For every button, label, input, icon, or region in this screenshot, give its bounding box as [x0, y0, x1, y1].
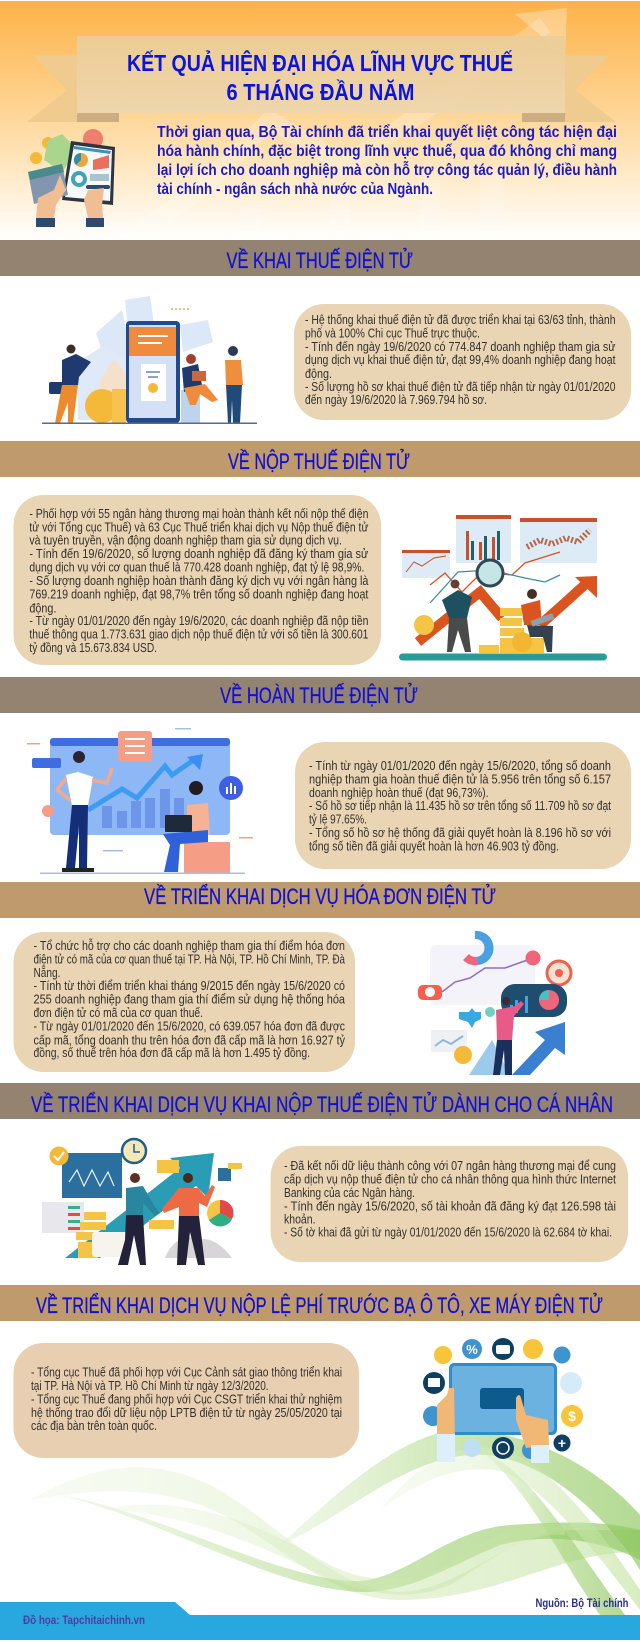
e-refund text: tỷ lệ 97.65%. — [309, 812, 367, 826]
e-refund text: doanh nghiệp hoàn thuế (đạt 96,73%). — [309, 786, 489, 800]
illustration: tablet with service icons: $ — [568, 1408, 576, 1424]
e-invoice text: 255 doanh nghiệp đang tham gia thí điểm sử dụng hệ thống hóa — [34, 992, 345, 1006]
illustration: tablet with service icons — [423, 1338, 583, 1463]
registration fee text: hệ thống trao đổi dữ liệu nộp LPTB điện tử từ ngày 25/05/2020 tại — [31, 1406, 342, 1420]
e-invoice text: - Từ ngày 01/01/2020 đến 15/6/2020, có 639.057 hóa đơn đã được — [34, 1020, 345, 1034]
footer credit: Đồ họa: Tapchitaichinh.vn — [23, 1615, 145, 1627]
registration fee text: tại TP. Hà Nội và TP. Hồ Chí Minh từ ngày 12/3/2020. — [31, 1379, 269, 1393]
header background — [0, 1, 640, 240]
title: KẾT QUẢ HIỆN ĐẠI HÓA LĨNH VỰC THUẾ — [127, 48, 513, 76]
footer band — [0, 1602, 640, 1640]
registration fee text: - Tổng cục Thuế đã phối hợp với Cục Cảnh sát giao thông triển khai — [31, 1366, 342, 1380]
e-payment text: dụng dịch vụ với cơ quan thuế là 770.428 doanh nghiệp, đạt tỷ lệ 98,9%. — [29, 560, 364, 574]
e-payment text: - Phối hợp với 55 ngân hàng thương mại hoàn thành kết nối nộp thế điện — [29, 507, 368, 521]
e-invoice text — [34, 938, 346, 1060]
registration fee text: các địa bàn trên toàn quốc. — [31, 1419, 157, 1433]
registration fee text — [31, 1366, 342, 1433]
section heading band 4 — [0, 882, 640, 918]
e-refund text: tổng số tiền đã giải quyết hoàn là hơn 46.903 tỷ đồng. — [309, 839, 559, 853]
e-filing text: phố và 100% Chi cục Thuế trực thuộc. — [305, 326, 480, 340]
e-payment text — [29, 507, 369, 655]
panel: e-refund — [295, 742, 631, 869]
section heading band 4: VỀ TRIỂN KHAI DỊCH VỤ HÓA ĐƠN ĐIỆN TỬ — [144, 884, 496, 909]
e-payment text: tỷ đồng và 15.673.834 USD. — [29, 641, 157, 655]
panel: registration fee — [14, 1343, 359, 1458]
e-invoice text: Nẵng. — [34, 965, 60, 980]
panel: e-invoice — [14, 932, 355, 1072]
personal e-tax text: khoản. — [284, 1212, 316, 1226]
panel: e-payment — [14, 495, 381, 665]
e-payment text: thuế thông qua 1.773.631 giao dịch nộp thuế điện tử với số tiền là 300.601 — [29, 627, 368, 641]
illustration: mobile tax filing — [42, 296, 257, 424]
e-payment text: - Tính đến 19/6/2020, số lượng doanh nghiệp đã đăng ký tham gia sử — [29, 547, 369, 561]
illustration: charts and growth arrow — [399, 515, 607, 660]
section heading band 3: VỀ HOÀN THUẾ ĐIỆN TỬ — [220, 683, 418, 708]
section heading band 2 — [0, 441, 640, 477]
title: 6 THÁNG ĐẦU NĂM — [226, 78, 414, 105]
e-invoice text: cấp mã, tổng doanh thu trên hóa đơn đã cấp mã là hơn 16.927 tỷ — [34, 1033, 346, 1047]
intro paragraph: tài chính - ngân sách nhà nước của Ngành. — [157, 181, 433, 198]
e-invoice text: điện tử có mã của cơ quan thuế tại TP. Hà Nội, TP. Hồ Chí Minh, TP. Đà — [34, 952, 345, 966]
illustration: tablet with service icons: + — [558, 1435, 566, 1451]
e-filing text: đến ngày 19/6/2020 là 7.969.794 hồ sơ. — [305, 393, 487, 407]
illustration: refund growth board — [27, 728, 253, 874]
section heading band 2: VỀ NỘP THUẾ ĐIỆN TỬ — [228, 449, 410, 474]
panel: e-filing — [294, 304, 631, 420]
registration fee text: - Tổng cục Thuế đang phối hợp với Cục CSGT triển khai thử nghiệm — [31, 1393, 342, 1407]
e-filing text: động. — [305, 367, 332, 381]
e-payment text: động. — [29, 601, 56, 615]
e-payment text: - Số lượng doanh nghiệp hoàn thành đăng ký dịch vụ với ngân hàng là — [29, 574, 368, 588]
intro paragraph — [157, 124, 617, 198]
e-invoice text: - Tính từ thời điểm triển khai tháng 9/2015 đến ngày 15/6/2020 có — [34, 979, 345, 993]
icon: calculator and tablet with hands — [28, 129, 115, 227]
title — [127, 48, 513, 105]
e-payment text: và tuyên truyền, vận động doanh nghiệp tham gia sử dụng dịch vụ. — [29, 534, 342, 548]
green waves background — [30, 1430, 640, 1615]
background arrow watermark — [130, 8, 567, 238]
panel: personal e-tax — [271, 1146, 628, 1262]
illustration: handshake — [42, 1139, 242, 1265]
section heading band 5 — [0, 1083, 640, 1119]
section heading band 6 — [0, 1285, 640, 1321]
e-invoice text: đồng, số thuế trên hóa đơn đã cấp mã là hơn 1.495 tỷ đồng. — [34, 1046, 310, 1060]
personal e-tax text: Banking của các Ngân hàng. — [284, 1186, 415, 1200]
e-payment text: - Từ ngày 01/01/2020 đến ngày 19/6/2020, các doanh nghiệp đã nộp tiền — [29, 614, 368, 628]
section heading band 1: VỀ KHAI THUẾ ĐIỆN TỬ — [226, 248, 413, 273]
title ribbon — [27, 36, 616, 122]
personal e-tax text — [284, 1159, 616, 1240]
e-payment text: 769.219 doanh nghiệp, đạt 98,7% trên tổng số doanh nghiệp đang hoạt — [29, 588, 369, 602]
e-invoice text: - Tổ chức hỗ trợ cho các doanh nghiệp tham gia thí điểm hóa đơn — [34, 938, 345, 953]
e-refund text — [309, 759, 611, 853]
e-filing text — [305, 313, 616, 407]
illustration: tablet with service icons: % — [466, 1342, 478, 1357]
illustration: invoice analytics — [418, 931, 571, 1075]
e-invoice text: đơn điện tử có mã của cơ quan thuế. — [34, 1006, 203, 1020]
e-payment text: tử với Tổng cục Thuế) và 63 Cục Thuế triển khai dịch vụ Nộp thuế điện tử — [29, 520, 369, 534]
section heading band 1 — [0, 240, 640, 276]
section heading band 3 — [0, 677, 640, 713]
